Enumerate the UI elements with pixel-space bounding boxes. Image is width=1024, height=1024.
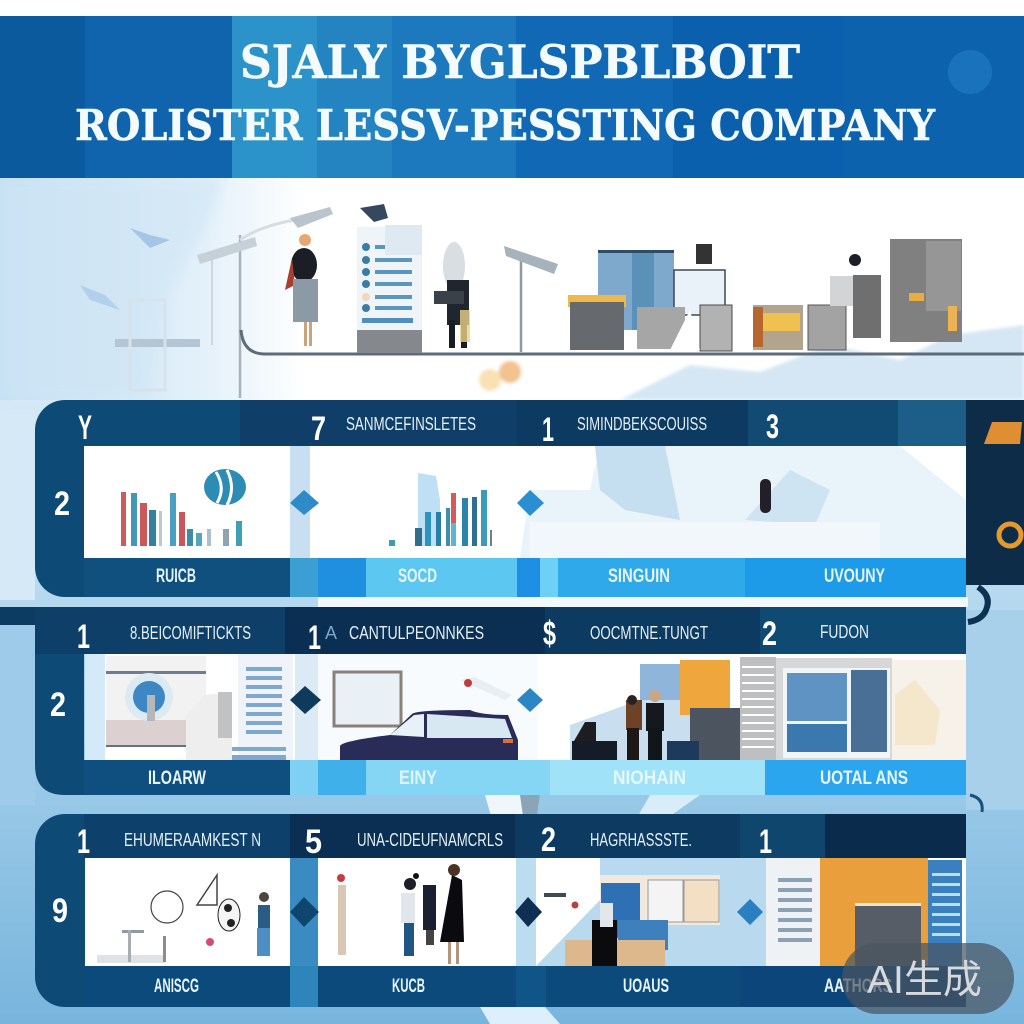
machines <box>568 239 962 351</box>
bar chart 2 <box>389 473 492 546</box>
header strip: 7 <box>311 410 326 448</box>
illustration: people group <box>337 864 464 964</box>
side panel icons <box>966 400 1024 585</box>
icon: dark capsule <box>760 479 771 513</box>
footer strip: ANISCG <box>154 976 199 997</box>
header strip: 1 <box>759 823 772 861</box>
header strip: 3 <box>766 408 779 446</box>
panel: row 2 <box>35 607 966 795</box>
header strip: 8.BEICOMIFTICKTS <box>130 623 251 643</box>
header strip: SIMINDBEKSCOUISS <box>577 414 707 434</box>
header strip: HAGRHASSSTE. <box>590 830 692 850</box>
illustration: vented cabinet <box>740 657 776 760</box>
diamond 6 <box>515 897 542 927</box>
footer strip: UOTAL ANS <box>820 768 908 789</box>
header strip: SANMCEFINSLETES <box>346 414 476 434</box>
content area <box>85 858 966 966</box>
footer strip: EINY <box>399 768 437 789</box>
header strip: A <box>325 623 337 643</box>
header strip: 1 <box>77 618 90 656</box>
hero scene <box>80 204 1024 398</box>
panel: row 1 <box>35 400 966 597</box>
illustration: geometry instruments <box>97 875 270 963</box>
footer strip: SINGUIN <box>608 566 670 587</box>
header strip: CANTULPEONNKES <box>349 623 484 643</box>
footer strip <box>84 760 966 795</box>
header strip: OOCMTNE.TUNGT <box>590 623 708 643</box>
diamond 7 <box>737 899 763 925</box>
header strip: Y <box>78 409 92 447</box>
header strip: 2 <box>762 615 777 653</box>
footer strip: RUICB <box>156 566 196 587</box>
icon: blue globe <box>204 469 246 505</box>
illustration: window panel <box>776 658 940 760</box>
footer strip: NIOHAIN <box>613 768 686 789</box>
icon: orange box <box>984 422 1022 444</box>
header strip <box>77 814 966 861</box>
person left <box>285 234 318 346</box>
row number: 2 <box>54 485 70 523</box>
content area <box>85 654 966 760</box>
header strip <box>35 607 966 657</box>
footer strip: SOCD <box>398 566 437 587</box>
header strip: UNA-CIDEUFNAMCRLS <box>357 830 503 850</box>
header strip <box>78 400 966 449</box>
illustration: scanner <box>106 654 293 760</box>
illustration: orange cabinet <box>820 858 962 966</box>
diamond 5 <box>290 897 319 927</box>
row number: 2 <box>50 686 66 724</box>
watermark: AI生成 <box>867 959 982 1002</box>
diamond 2 <box>517 490 544 516</box>
illustration: framed board <box>334 672 401 726</box>
footer strip <box>84 558 966 597</box>
title line 2: ROLISTER LESSV-PESSTING COMPANY <box>75 101 936 150</box>
header banner <box>0 16 1024 178</box>
header strip: FUDON <box>820 622 869 642</box>
footer strip: UVOUNY <box>824 566 885 587</box>
illustration: car <box>340 677 518 760</box>
person right <box>434 242 470 348</box>
header strip: 2 <box>541 821 556 859</box>
footer strip: UOAUS <box>623 976 669 997</box>
panel: row 3 <box>35 814 966 1007</box>
content area <box>84 446 966 558</box>
footer strip: AATHORS <box>824 976 892 997</box>
connector lower <box>970 795 982 812</box>
row strip left <box>0 607 90 625</box>
illustration: desk worker <box>544 875 720 967</box>
title line 1: SJALY BYGLSPBLBOIT <box>240 35 800 89</box>
ground rail <box>241 330 1024 354</box>
diamond 3 <box>290 686 321 714</box>
header strip: EHUMERAAMKEST N <box>124 830 261 850</box>
header strip: 1 <box>77 823 90 861</box>
footer strip <box>84 966 966 1007</box>
diamond 4 <box>517 688 543 712</box>
header strip: $ <box>543 615 556 653</box>
diamond 1 <box>290 490 319 515</box>
row number: 9 <box>52 892 68 930</box>
bar chart 1 <box>121 492 242 546</box>
header strip: 5 <box>305 823 322 861</box>
connector top <box>968 587 988 622</box>
street lamps <box>80 207 558 398</box>
header strip: 1 <box>308 619 321 657</box>
watermark <box>842 943 1014 1014</box>
icon: orange ring <box>999 524 1021 546</box>
orange flower <box>479 361 521 391</box>
footer strip: ILOARW <box>148 768 206 789</box>
header strip: 1 <box>542 411 554 449</box>
illustration: workers <box>570 660 744 760</box>
footer strip: KUCB <box>392 976 425 997</box>
illustration: list document <box>766 858 820 966</box>
kiosk <box>357 204 422 353</box>
